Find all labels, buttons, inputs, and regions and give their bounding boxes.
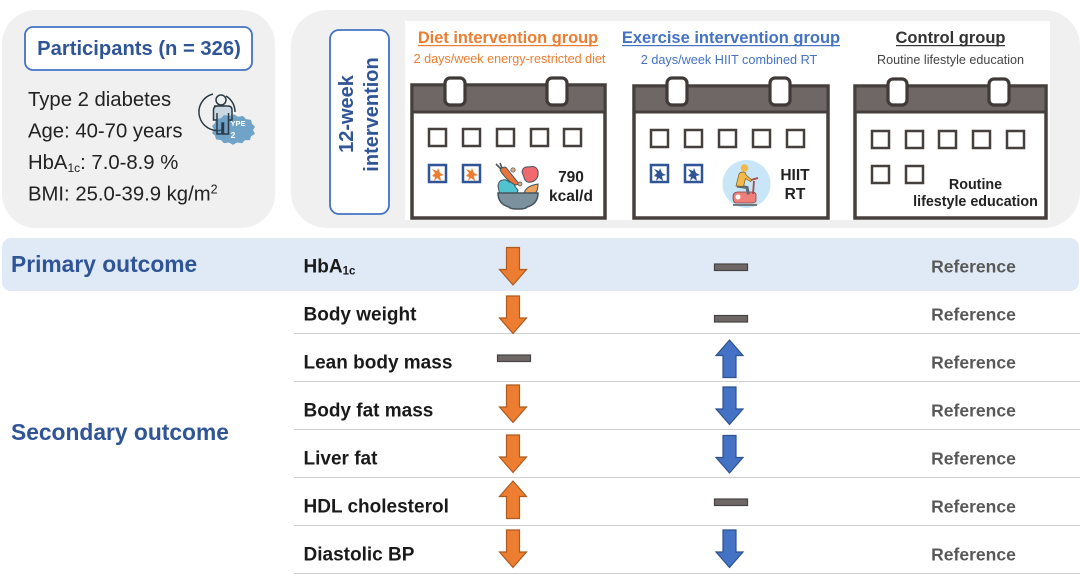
icon: food bowl: [496, 163, 538, 209]
participant criteria: : 7.0-8.9 %: [80, 152, 178, 174]
participants heading: Participants (n = 326): [37, 38, 241, 60]
control group reference labels: Reference: [931, 352, 1016, 372]
outcome labels: Liver fat: [304, 448, 378, 470]
control group reference labels: Reference: [931, 256, 1016, 276]
exercise dose text: RT: [785, 186, 806, 203]
outcome labels: Body fat mass: [304, 400, 433, 422]
12-week intervention label: intervention: [361, 57, 383, 172]
participant criteria: HbA: [28, 152, 67, 174]
diet group arrows: [498, 248, 530, 568]
calendar: exercise: [634, 78, 828, 218]
diet group heading: 2 days/week energy-restricted diet: [414, 52, 606, 66]
participant criteria: [28, 89, 218, 206]
diet dose text: 790: [558, 169, 584, 186]
12-week intervention label: [330, 30, 389, 214]
calendar: control: [855, 79, 1046, 218]
row dividers: [294, 333, 1080, 574]
panel: intervention: [291, 10, 1080, 228]
exercise dose text: [780, 167, 810, 203]
icon: exercise bike: [722, 160, 770, 208]
heading: secondary outcome: Secondary outcome: [11, 419, 229, 445]
outcome labels: Lean body mass: [304, 352, 452, 374]
exercise day markers: [651, 165, 702, 182]
control group heading: [877, 29, 1024, 67]
control group heading: Control group: [896, 29, 1005, 47]
control group reference labels: Reference: [931, 304, 1016, 324]
control group reference labels: Reference: [931, 496, 1016, 516]
exercise group heading: Exercise intervention group: [622, 29, 840, 47]
exercise group heading: 2 days/week HIIT combined RT: [641, 53, 818, 67]
control group reference labels: Reference: [931, 400, 1016, 420]
calendar: diet: [412, 78, 605, 218]
12-week intervention label: 12-week: [336, 74, 358, 153]
panel: primary outcome band: [2, 238, 1079, 291]
control group reference labels: Reference: [931, 544, 1016, 564]
diet group heading: Diet intervention group: [418, 29, 598, 47]
exercise group heading: [622, 29, 840, 67]
diet dose text: [549, 169, 593, 205]
diet day markers: [429, 165, 480, 182]
outcome labels: 1c: [343, 266, 356, 278]
outcome labels: [304, 256, 452, 566]
icon: person with type 2 badge: 2: [231, 130, 236, 140]
control group heading: Routine lifestyle education: [877, 53, 1024, 67]
icon: person with type 2 badge: [199, 94, 255, 145]
control group reference labels: [931, 256, 1016, 564]
outcome labels: Diastolic BP: [304, 544, 415, 566]
exercise dose text: HIIT: [780, 167, 810, 184]
diet group heading: [414, 29, 606, 66]
heading: primary outcome: Primary outcome: [11, 251, 197, 277]
outcome labels: Body weight: [304, 304, 417, 326]
control group reference labels: Reference: [931, 448, 1016, 468]
participants heading: [25, 27, 252, 70]
participant criteria: Type 2 diabetes: [28, 89, 171, 111]
panel: participants: [2, 10, 275, 228]
outcome labels: HDL cholesterol: [304, 496, 449, 518]
control text: [913, 177, 1038, 210]
participant criteria: 2: [211, 182, 218, 196]
diet dose text: kcal/d: [549, 188, 593, 205]
outcome labels: HbA: [304, 256, 343, 278]
participant criteria: 1c: [67, 161, 80, 175]
control text: lifestyle education: [913, 194, 1038, 210]
exercise group arrows: [714, 264, 748, 568]
icon: person with type 2 badge: YPE: [230, 119, 246, 128]
participant criteria: BMI: 25.0-39.9 kg/m: [28, 184, 211, 206]
participant criteria: Age: 40-70 years: [28, 120, 182, 142]
control text: Routine: [949, 177, 1002, 193]
